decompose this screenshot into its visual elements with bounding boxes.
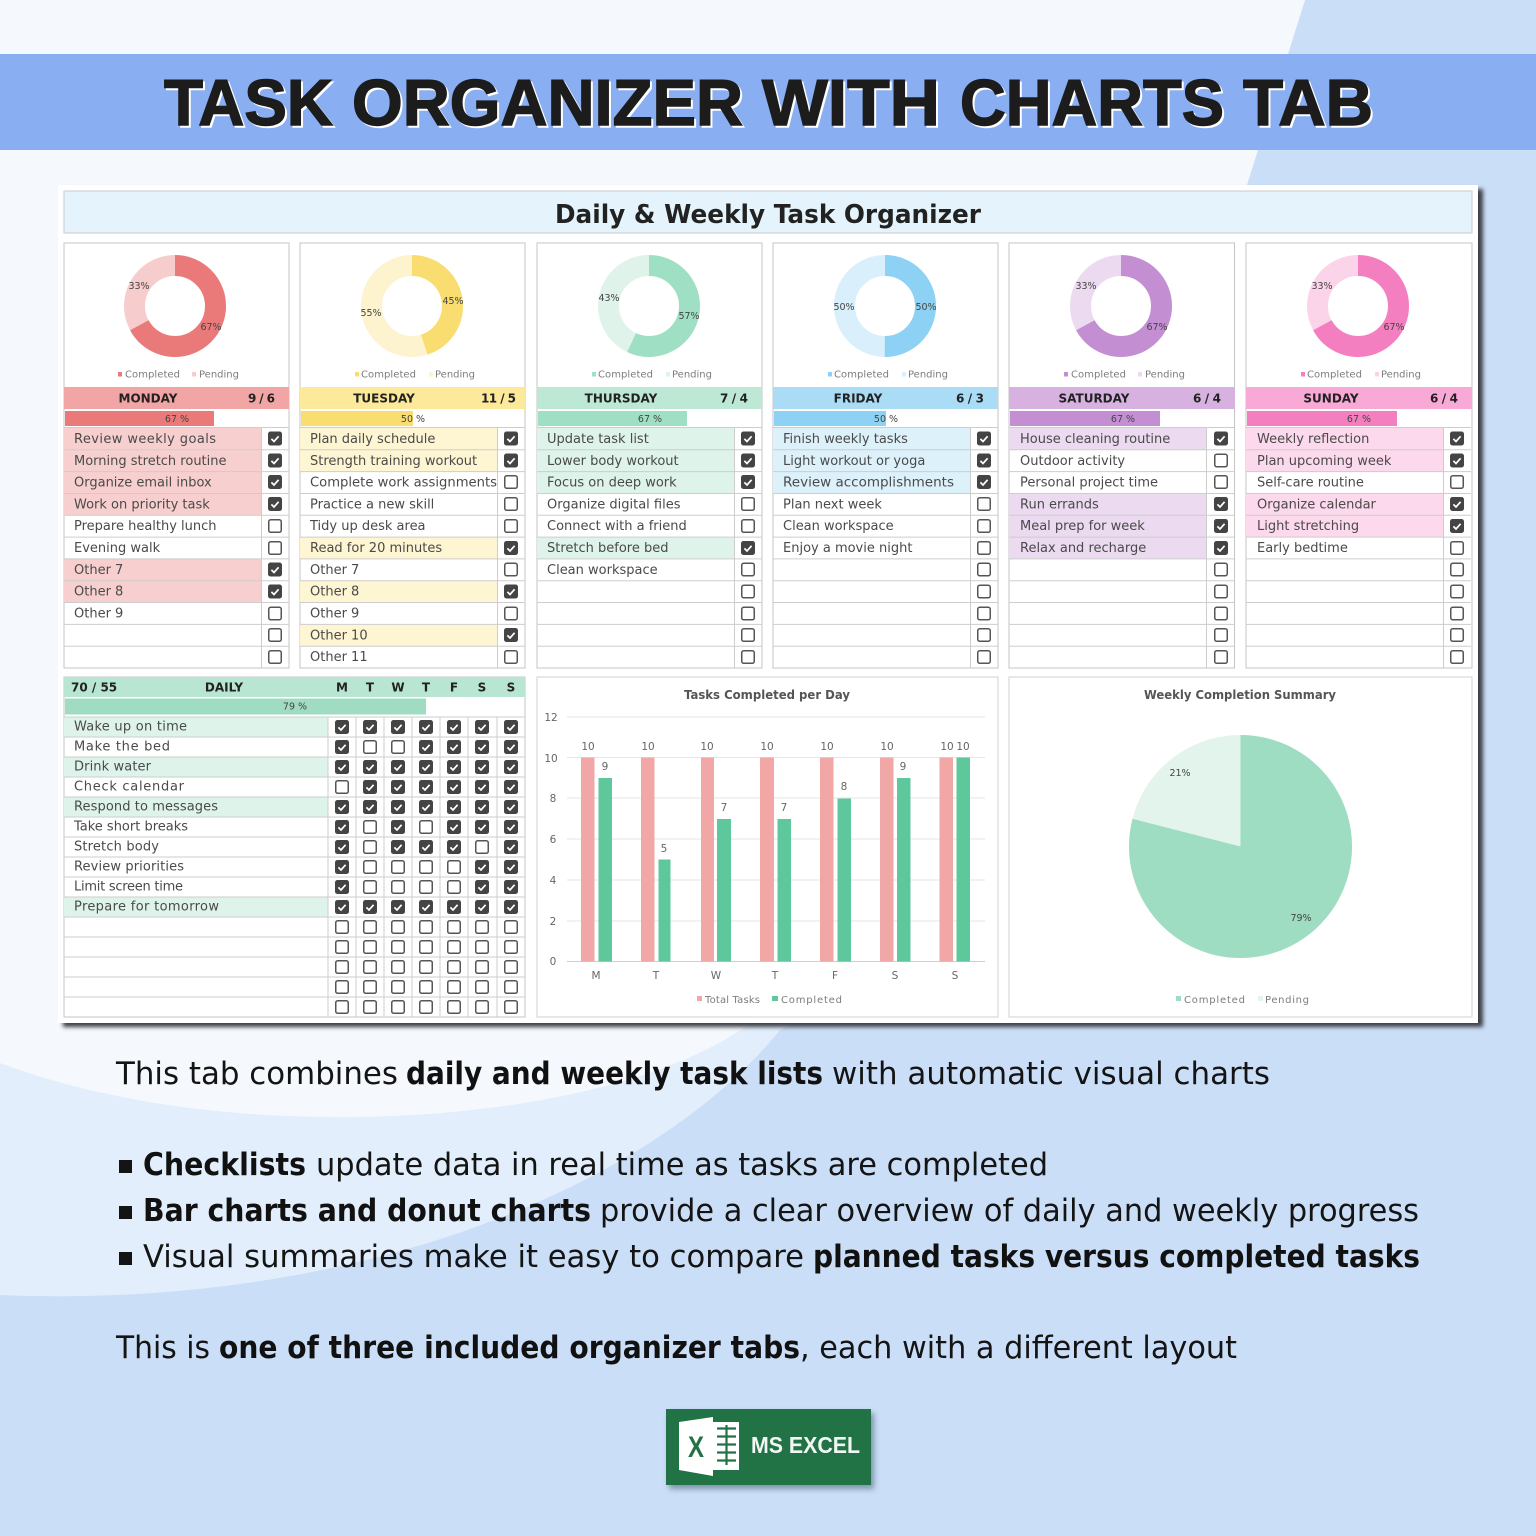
y axis labels: 6 (550, 834, 557, 846)
day header: 6 / 4 (1430, 392, 1458, 406)
panel: bar chart (537, 677, 998, 1017)
title: CHARTS (960, 66, 1224, 139)
task rows: Personal project time (1020, 476, 1158, 490)
bar value labels (581, 741, 970, 855)
donut chart: Friday: 50% (915, 302, 937, 313)
y axis labels (544, 712, 558, 968)
task rows: Practice a new skill (310, 498, 434, 512)
bullet list: update data in real time as tasks are completed (316, 1147, 1048, 1183)
x axis labels: T (652, 970, 660, 982)
day header (1009, 387, 1235, 409)
tracker header: S (478, 680, 486, 694)
legend (592, 370, 712, 380)
task rows (1009, 428, 1234, 668)
task rows: Run errands (1020, 498, 1099, 512)
tracker rows: Drink water (74, 760, 152, 774)
x axis labels: T (771, 970, 779, 982)
legend: Pending (199, 370, 239, 380)
task rows: Other 9 (310, 606, 359, 622)
donut chart: Tuesday: 55% (360, 308, 382, 319)
task rows: Meal prep for week (1020, 519, 1145, 534)
day header (1246, 387, 1472, 409)
bar value labels: 9 (900, 761, 906, 773)
x axis labels: M (591, 970, 601, 982)
donut chart: Thursday: 57% (678, 311, 700, 322)
progress bar: 50 % (401, 414, 425, 425)
progress bar: 67 % (1347, 414, 1371, 425)
donut chart: Thursday (598, 266, 700, 346)
panel: daily habit tracker (64, 677, 525, 1017)
bullet list (119, 1147, 1420, 1275)
task rows: Complete work assignments (310, 476, 497, 490)
tracker header: 70 / 55 (71, 680, 117, 694)
bar value labels: 10 (760, 741, 774, 753)
donut chart: Tuesday (360, 266, 464, 346)
task rows (64, 428, 289, 668)
pie: 79% (1290, 913, 1312, 924)
day header: THURSDAY (585, 392, 658, 406)
task rows: Evening walk (74, 541, 161, 556)
task rows: Plan daily schedule (310, 432, 435, 447)
MS Excel badge (666, 1409, 871, 1485)
pie (1129, 735, 1352, 958)
day header: SATURDAY (1059, 392, 1130, 406)
task rows: Connect with a friend (547, 519, 687, 534)
bar value labels: 5 (661, 843, 667, 855)
day header: TUESDAY (353, 392, 415, 406)
tracker rows: Limit screen time (74, 880, 183, 894)
legend (1301, 370, 1421, 380)
task rows: Plan upcoming week (1257, 454, 1392, 469)
tracker header: M (336, 680, 348, 694)
bar value labels: 10 (581, 741, 595, 753)
bar value labels: 10 (700, 741, 714, 753)
donut chart: Sunday: 33% (1311, 281, 1333, 292)
donut chart: Sunday (1311, 266, 1405, 346)
task rows: Tidy up desk area (309, 519, 426, 534)
legend: Completed (1071, 370, 1126, 380)
tracker progress bar (65, 698, 426, 714)
badge label: MS EXCEL (751, 1432, 860, 1458)
task rows: Clean workspace (547, 563, 658, 578)
task rows: Work on priority task (74, 498, 210, 512)
legend (118, 370, 239, 380)
donut chart: Thursday: 43% (598, 293, 620, 304)
bar value labels: 10 (820, 741, 834, 753)
task rows: Self-care routine (1257, 476, 1364, 490)
task rows: Weekly reflection (1257, 432, 1369, 447)
bar value labels: 8 (841, 781, 847, 793)
progress bar: 67 % (165, 414, 189, 425)
task rows: Strength training workout (310, 454, 477, 469)
task rows (773, 428, 998, 668)
panel: Tuesday (300, 243, 525, 668)
donut chart: Monday (128, 266, 222, 346)
day header: FRIDAY (834, 392, 883, 406)
legend: Pending (435, 370, 475, 380)
donut chart: Sunday: 67% (1383, 322, 1405, 333)
legend (355, 370, 475, 380)
tracker header (64, 677, 525, 697)
day header: 6 / 3 (956, 392, 984, 406)
closing text: This is (115, 1330, 210, 1366)
panel: pie chart (1009, 677, 1472, 1017)
bar chart legend (697, 995, 842, 1006)
task rows (300, 428, 525, 668)
bar value labels: 7 (781, 802, 787, 814)
sheet heading (64, 191, 1472, 233)
tracker header: T (422, 680, 431, 694)
panel: Thursday (537, 243, 762, 668)
progress bar: 67 % (638, 414, 662, 425)
bullet list: provide a clear overview of daily and weekly progress (600, 1193, 1419, 1229)
title: TAB (1243, 66, 1373, 139)
task rows: Stretch before bed (547, 541, 668, 556)
day header: 9 / 6 (248, 392, 275, 406)
task rows: Other 8 (74, 584, 123, 600)
task rows: Read for 20 minutes (310, 541, 442, 556)
task rows: Focus on deep work (547, 476, 677, 490)
tracker header: S (507, 680, 515, 694)
icon: Excel (679, 1417, 739, 1476)
y axis labels: 2 (550, 916, 556, 928)
day header (773, 387, 998, 409)
task rows: Other 7 (310, 563, 359, 578)
closing text: , each with a different layout (800, 1330, 1237, 1366)
day header: 6 / 4 (1193, 392, 1221, 406)
task rows: Review weekly goals (74, 432, 216, 447)
tracker progress bar: 79 % (283, 702, 307, 712)
panel: Saturday (1009, 243, 1235, 668)
task rows: House cleaning routine (1020, 432, 1170, 447)
tracker rows: Stretch body (74, 840, 159, 854)
donut chart: Saturday (1075, 266, 1168, 346)
task rows: Finish weekly tasks (783, 432, 908, 447)
legend: Completed (361, 370, 416, 380)
pie legend (1176, 995, 1309, 1006)
bullet list: planned tasks versus completed tasks (813, 1239, 1420, 1275)
task rows: Other 10 (310, 628, 368, 644)
legend (828, 370, 948, 380)
panel: Friday (773, 243, 998, 668)
day header (64, 387, 289, 409)
progress bar (301, 411, 425, 426)
day header: SUNDAY (1303, 392, 1359, 406)
title: ORGANIZER (352, 66, 743, 139)
x axis labels: S (952, 970, 959, 982)
task rows: Plan next week (783, 498, 882, 512)
intro text: This tab combines (115, 1056, 398, 1092)
task rows: Organize email inbox (74, 476, 212, 490)
bullet list: Checklists (143, 1147, 306, 1183)
x axis labels: F (832, 970, 838, 982)
tracker rows: Respond to messages (74, 800, 218, 814)
bullet list: Visual summaries make it easy to compare (143, 1239, 804, 1275)
x axis labels: W (711, 970, 722, 982)
donut chart: Monday: 33% (128, 281, 150, 292)
day header (537, 387, 762, 409)
pie legend: Pending (1265, 995, 1309, 1006)
progress bar (1247, 411, 1397, 426)
bar value labels: 10 (940, 741, 954, 753)
task rows: Update task list (547, 432, 649, 447)
intro text: daily and weekly task lists (406, 1056, 823, 1092)
y axis labels: 8 (550, 793, 556, 805)
closing text (115, 1330, 1237, 1366)
tracker rows: Take short breaks (73, 820, 188, 834)
bar chart legend: Completed (781, 995, 842, 1006)
task rows: Lower body workout (547, 454, 679, 469)
legend: Pending (908, 370, 948, 380)
progress bar (1010, 411, 1160, 426)
legend: Completed (125, 370, 180, 380)
donut chart: Friday: 50% (833, 302, 855, 313)
x axis labels: S (892, 970, 899, 982)
bar chart legend: Total Tasks (704, 995, 760, 1006)
pie legend: Completed (1184, 995, 1245, 1006)
legend: Completed (834, 370, 889, 380)
tracker header: T (366, 680, 375, 694)
panel: organizer sheet (58, 185, 1478, 1023)
task rows: Other 9 (74, 606, 123, 622)
title: WITH (762, 66, 940, 139)
pie: 21% (1169, 768, 1191, 779)
legend: Pending (1381, 370, 1421, 380)
donut chart: Saturday: 67% (1146, 322, 1168, 333)
task rows: Other 7 (74, 563, 123, 578)
tracker header: DAILY (205, 680, 243, 694)
legend: Pending (1145, 370, 1185, 380)
tracker rows: Wake up on time (74, 720, 187, 734)
task rows (1246, 428, 1471, 668)
bar value labels: 9 (602, 761, 608, 773)
task rows: Clean workspace (783, 519, 894, 534)
progress bar (774, 411, 898, 426)
bar value labels: 10 (641, 741, 655, 753)
bar value labels: 10 (956, 741, 970, 753)
tracker header: W (391, 680, 405, 694)
task rows: Enjoy a movie night (783, 541, 912, 556)
task rows: Early bedtime (1257, 541, 1348, 556)
donut chart: Saturday: 33% (1075, 281, 1097, 292)
pie chart title: Weekly Completion Summary (1144, 687, 1336, 702)
legend: Completed (1307, 370, 1362, 380)
task rows: Review accomplishments (783, 476, 954, 490)
progress bar (65, 411, 214, 426)
sheet heading: Daily & Weekly Task Organizer (555, 200, 981, 230)
tracker rows: Review priorities (74, 860, 184, 874)
task rows: Morning stretch routine (74, 454, 227, 469)
task rows: Relax and recharge (1020, 541, 1146, 556)
panel: Monday (64, 243, 289, 668)
bullet list: Bar charts and donut charts (143, 1193, 591, 1229)
y axis labels: 12 (544, 712, 558, 724)
progress bar: 67 % (1111, 414, 1135, 425)
title: TASK (164, 66, 333, 139)
closing text: one of three included organizer tabs (219, 1330, 800, 1366)
tracker rows: Check calendar (74, 780, 185, 794)
task rows: Other 11 (310, 650, 368, 665)
day header (300, 387, 525, 409)
day header: MONDAY (119, 392, 178, 406)
y axis labels: 10 (544, 753, 558, 765)
bar chart title: Tasks Completed per Day (684, 687, 850, 702)
progress bar (538, 411, 687, 426)
task rows: Light workout or yoga (783, 454, 925, 469)
day header: 11 / 5 (481, 392, 516, 406)
task rows: Organize calendar (1257, 498, 1377, 512)
bar value labels: 7 (721, 802, 727, 814)
tracker rows: Prepare for tomorrow (74, 900, 219, 914)
task rows: Other 8 (310, 584, 359, 600)
task rows: Outdoor activity (1020, 454, 1125, 469)
bars: completed (598, 758, 970, 962)
title banner (0, 54, 1536, 150)
tracker header: F (450, 680, 458, 694)
progress bar: 50 % (874, 414, 898, 425)
x axis labels (591, 970, 959, 982)
y axis labels: 4 (550, 875, 557, 887)
tracker rows: Make the bed (74, 740, 170, 754)
day header: 7 / 4 (720, 392, 748, 406)
tracker rows (64, 717, 525, 1017)
intro text (115, 1056, 1270, 1092)
legend: Pending (672, 370, 712, 380)
task rows: Prepare healthy lunch (74, 519, 217, 534)
donut chart: Friday (833, 266, 937, 346)
task rows: Light stretching (1257, 519, 1359, 534)
icon: Excel: X (688, 1431, 704, 1464)
bar value labels: 10 (880, 741, 894, 753)
intro text: with automatic visual charts (832, 1056, 1270, 1092)
task rows: Organize digital files (547, 498, 681, 512)
title (164, 66, 1373, 139)
legend (1064, 370, 1185, 380)
legend: Completed (598, 370, 653, 380)
donut chart: Monday: 67% (200, 322, 222, 333)
donut chart: Tuesday: 45% (442, 296, 464, 307)
panel: Sunday (1246, 243, 1472, 668)
y axis labels: 0 (550, 956, 556, 968)
bars: total tasks (581, 758, 953, 962)
task rows (537, 428, 762, 668)
